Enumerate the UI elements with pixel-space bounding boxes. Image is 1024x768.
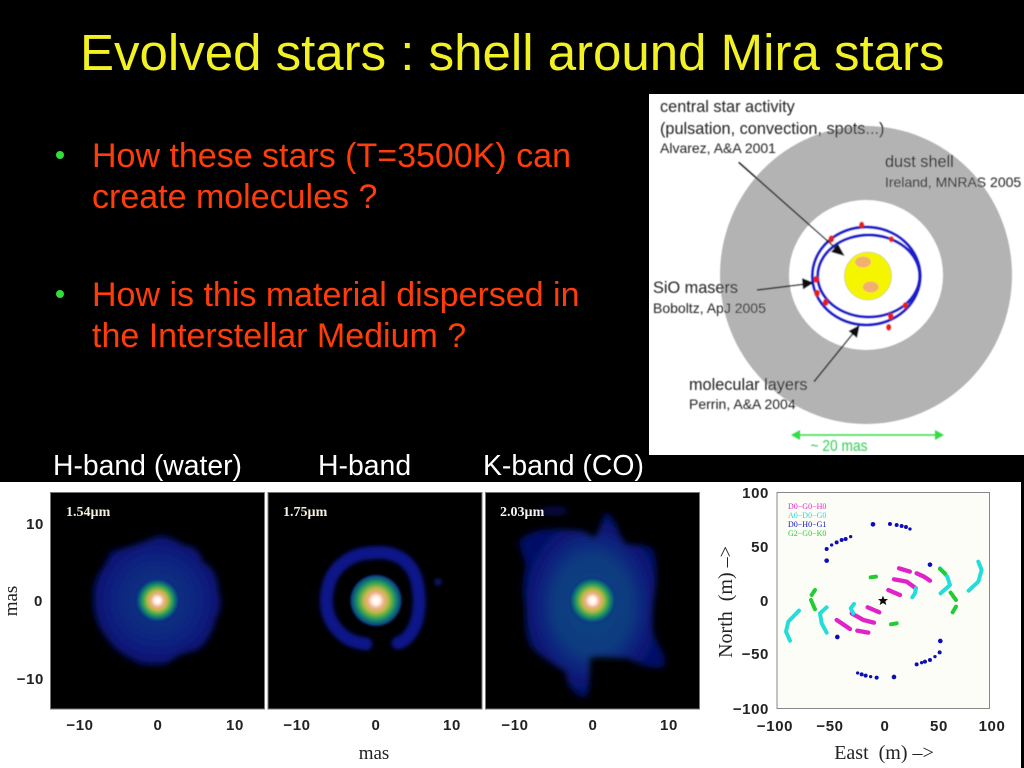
panel: interferometric images [1,492,700,764]
chart x ticks: 100 [979,718,1005,735]
label: molecular layers: molecular layers [689,376,808,394]
image axis: y ticks: 0 [34,593,43,610]
band labels: H-band (water) [53,450,242,482]
band labels: H-band [318,450,411,482]
blue tracks [824,522,943,680]
chart: baseline coverage (u-v plane) [715,485,1005,764]
arrow: central star activity [739,162,845,256]
chart x ticks [757,718,1005,735]
chart axis titles: East (m) –> [834,742,934,764]
arrow: SiO masers [757,278,814,290]
panel: white background for lower figures [0,482,1021,768]
chart x ticks: 0 [881,718,889,735]
label: central star activity: central star activity [660,98,796,116]
chart axis titles: North (m) –> [715,546,737,658]
label: molecular layers: Perrin, A&A 2004 [689,396,796,412]
green tracks [811,569,956,624]
chart x ticks: 50 [930,718,948,735]
image axis titles [1,586,389,764]
image axis: x ticks: 0 [154,717,162,734]
bullet 2: the Interstellar Medium ? [92,317,466,355]
image axis titles: mas [1,586,22,616]
arrow: 20 mas scale [791,430,944,440]
image axis: y ticks: −10 [17,671,44,688]
image axis: x ticks [66,717,678,734]
bullet 1: How these stars (T=3500K) can [92,137,571,175]
SiO maser spots [814,222,908,331]
label: central star activity [660,98,884,156]
star marker [878,596,888,605]
panel: Mira star shell diagram [649,94,1024,455]
image: 1.54 micron: 1.54µm [66,505,111,520]
molecular layers [812,227,920,325]
label: SiO masers: Boboltz, ApJ 2005 [653,300,766,316]
arrow: molecular layers [814,325,860,382]
image axis: x ticks: 0 [589,717,597,734]
label: SiO masers [653,279,766,316]
chart legend: D0−G0−H0 [788,502,826,511]
title: Evolved stars : shell around Mira stars [80,24,945,81]
label: dust shell: dust shell [885,153,954,171]
magenta tracks [837,568,930,633]
image: 1.75 micron: 1.75µm [283,505,328,520]
bullet 2: How is this material dispersed in [92,276,580,314]
image axis: y ticks [17,516,44,688]
bullet list: questions [56,137,580,355]
scale label: ~ 20 mas [810,438,868,455]
band labels: K-band (CO) [483,450,644,482]
bullet 1: create molecules ? [92,178,377,216]
chart y ticks: 50 [751,539,769,556]
image: 1.75 micron [268,492,482,709]
label: dust shell: Ireland, MNRAS 2005 [885,174,1021,190]
image: 2.03 micron [486,492,700,709]
bullet 1 [56,137,571,216]
inner cavity [789,200,943,350]
image: 1.54 micron [50,492,264,709]
image axis: y ticks: 10 [26,516,44,533]
central star [844,252,892,300]
image axis: x ticks: −10 [66,717,94,734]
chart y ticks: −100 [733,701,769,718]
label: dust shell [885,153,1021,190]
image axis: x ticks: −10 [283,717,311,734]
dust shell ring [720,126,1012,424]
image axis titles: mas [359,743,389,764]
image: 2.03 micron: 2.03µm [500,505,545,520]
chart x ticks: −50 [816,718,844,735]
chart y ticks [733,485,769,718]
label: central star activity: Alvarez, A&A 2001 [660,140,776,156]
chart x ticks: −100 [757,718,793,735]
chart y ticks: 0 [760,593,769,610]
chart legend [788,502,826,538]
label: SiO masers: SiO masers [653,279,738,297]
image axis: x ticks: −10 [501,717,529,734]
chart legend: A0−D0−G0 [788,511,826,520]
bullet 2 [56,276,580,355]
band labels [53,450,644,482]
chart y ticks: 100 [742,485,769,502]
chart legend: G2−G0−K0 [788,529,826,538]
chart axis titles [715,546,934,764]
cyan tracks [786,562,982,641]
chart legend: D0−H0−G1 [788,520,826,529]
image axis: x ticks: 0 [372,717,380,734]
image axis: x ticks: 10 [443,717,461,734]
chart y ticks: −50 [742,646,769,663]
image axis: x ticks: 10 [226,717,244,734]
label: molecular layers [689,376,808,412]
image axis: x ticks: 10 [660,717,678,734]
label: central star activity: (pulsation, convection, spots...) [660,120,884,138]
